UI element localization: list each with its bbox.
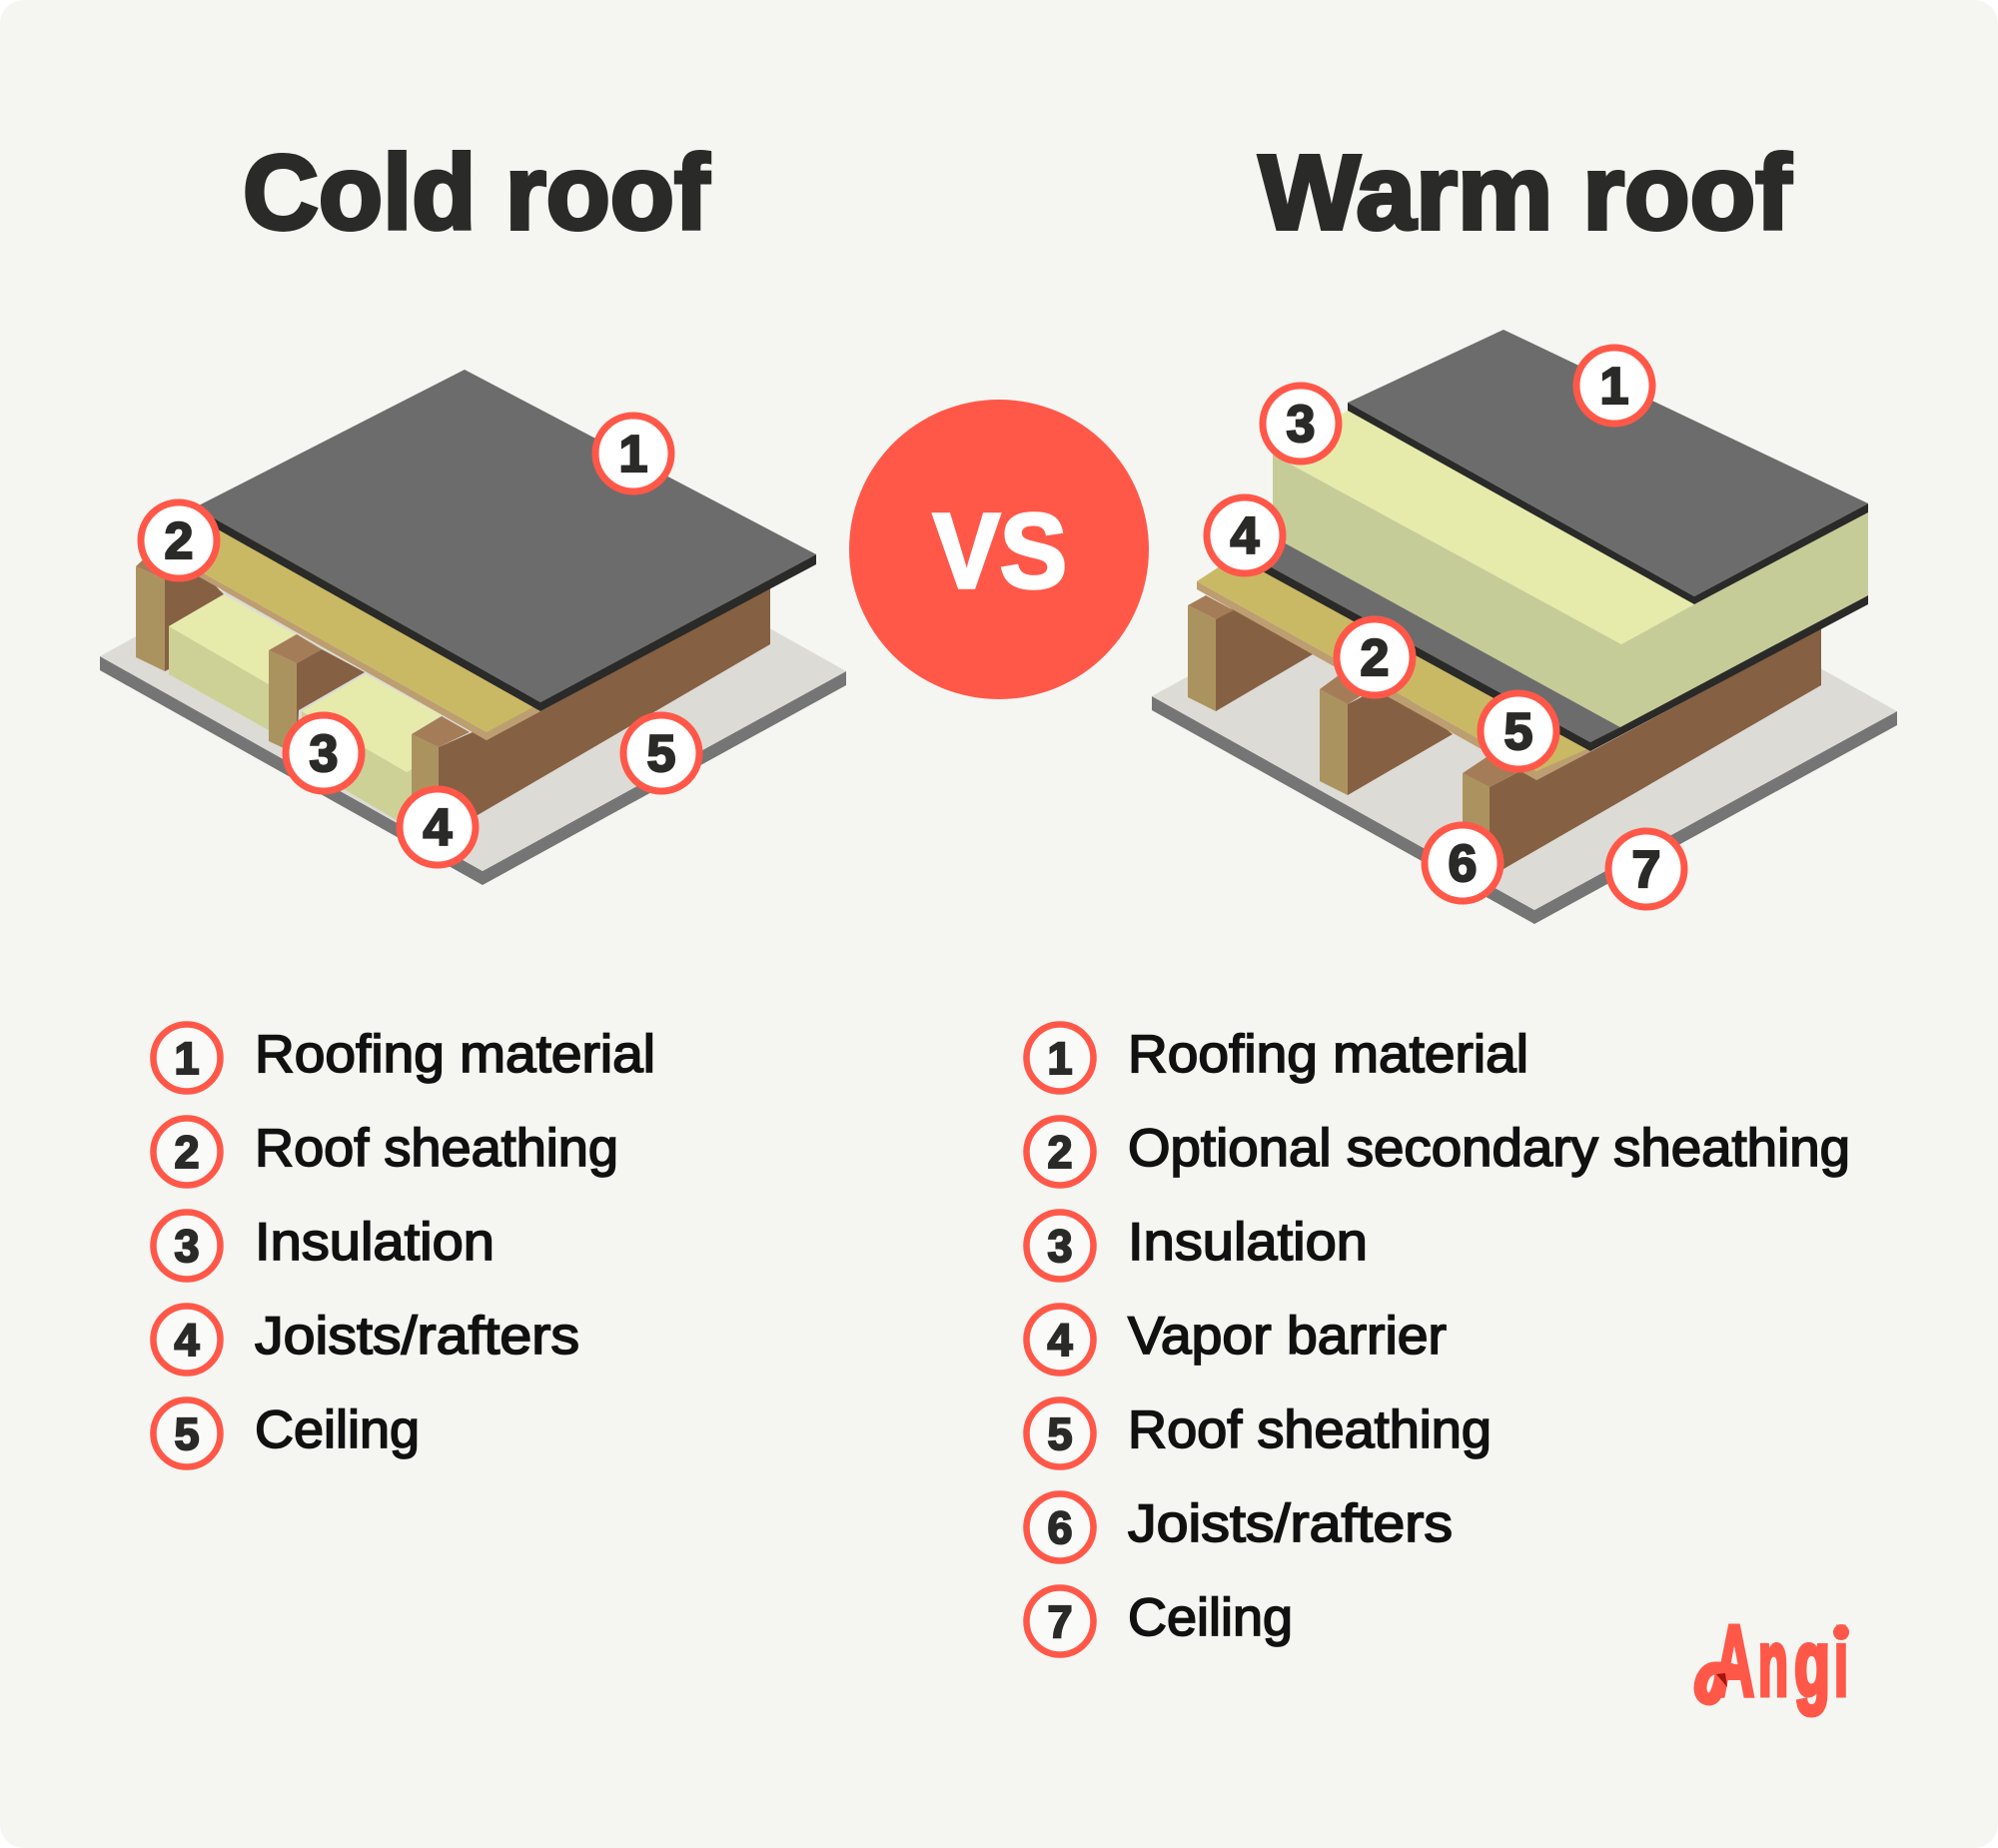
item 3: 3: [1047, 1221, 1073, 1272]
item 2: Roof sheathing: [255, 1119, 618, 1178]
item 3: [1027, 1213, 1368, 1279]
rigid insulation: [1273, 411, 1868, 727]
joist three with long side: [412, 587, 770, 837]
insulation batt two: [302, 674, 442, 829]
item 2: 2: [174, 1127, 200, 1178]
legend: cold roof: [154, 1025, 655, 1466]
item 5: 5: [174, 1408, 200, 1459]
logo: Angi: g: [1794, 1610, 1830, 1715]
marker 4: warm: 4: [1231, 507, 1260, 565]
vapor barrier: [1239, 530, 1868, 751]
marker 2: cold: 2: [165, 512, 193, 570]
item 7: Ceiling: [1128, 1588, 1293, 1647]
secondary sheathing: [1197, 547, 1591, 780]
item 1: [1027, 1025, 1528, 1091]
marker 5: warm: 5: [1504, 703, 1532, 761]
item 1: 1: [1047, 1033, 1073, 1084]
roofing material: [1348, 330, 1868, 604]
item 3: [154, 1213, 495, 1279]
item 2: [154, 1119, 618, 1185]
joist one: [136, 539, 224, 671]
item 7: 7: [1047, 1596, 1073, 1647]
item 1: 1: [174, 1033, 200, 1084]
insulation batt one: [169, 594, 296, 730]
marker 1: warm: [1576, 348, 1652, 424]
roofing material: [195, 370, 816, 711]
ceiling slab: [1152, 497, 1897, 924]
item 7: [1027, 1588, 1293, 1654]
logo: Angi: n: [1758, 1610, 1788, 1715]
marker 3: warm: 3: [1287, 396, 1315, 454]
item 4: Vapor barrier: [1128, 1307, 1447, 1366]
item 5: Roof sheathing: [1128, 1400, 1492, 1459]
marker 4: cold: 4: [424, 799, 453, 857]
joist two: [1320, 664, 1453, 795]
marker 6: warm: [1425, 825, 1500, 901]
item 2: 2: [1047, 1127, 1073, 1178]
VS badge: [849, 400, 1149, 699]
item 3: Insulation: [1128, 1213, 1368, 1272]
item 4: [154, 1307, 579, 1373]
roof sheathing: [165, 514, 540, 740]
item 5: Ceiling: [255, 1400, 420, 1459]
logo: Angi: [1700, 1605, 1849, 1717]
marker 4: warm: [1207, 497, 1283, 573]
title: Cold roof: Cold roof: [243, 134, 710, 252]
marker 5: cold: 5: [647, 725, 675, 783]
VS badge: VS: [933, 492, 1067, 610]
item 4: [1027, 1307, 1447, 1373]
logo: Angi: i: [1834, 1610, 1848, 1715]
diagram: cold roof cross-section: [100, 370, 846, 885]
marker 1: cold: [595, 416, 671, 491]
diagram: warm roof cross-section: [1152, 330, 1897, 924]
marker 6: warm: 6: [1449, 835, 1477, 893]
item 4: 4: [174, 1315, 200, 1366]
item 2: Optional secondary sheathing: [1128, 1119, 1850, 1178]
marker 7: warm: 7: [1632, 841, 1660, 899]
marker 3: warm: [1263, 386, 1339, 462]
logo: Angi: A: [1714, 1605, 1754, 1717]
item 6: Joists/rafters: [1128, 1494, 1453, 1553]
item 4: Joists/rafters: [255, 1307, 579, 1366]
item 5: 5: [1047, 1408, 1073, 1459]
item 3: 3: [174, 1221, 200, 1272]
item 3: Insulation: [255, 1213, 495, 1272]
marker 2: warm: 2: [1361, 629, 1389, 687]
item 5: [154, 1400, 420, 1466]
item 6: [1027, 1494, 1453, 1560]
joist three with long side: [1463, 628, 1821, 879]
legend: warm roof: [1027, 1025, 1850, 1654]
item 1: [154, 1025, 655, 1091]
marker 4: cold: [400, 789, 476, 865]
marker 5: cold: [623, 715, 699, 791]
marker 2: cold: [141, 502, 217, 578]
joist one: [1188, 595, 1313, 711]
marker 3: cold: 3: [310, 725, 338, 783]
item 1: Roofing material: [255, 1025, 655, 1084]
marker 1: cold: 1: [619, 426, 647, 483]
ceiling slab: [100, 457, 846, 885]
item 6: 6: [1047, 1502, 1073, 1553]
marker 3: cold: [286, 715, 362, 791]
item 1: Roofing material: [1128, 1025, 1528, 1084]
title: Warm roof: Warm roof: [1259, 134, 1792, 252]
marker 2: warm: [1337, 619, 1413, 695]
marker 1: warm: 1: [1600, 358, 1628, 416]
item 5: [1027, 1400, 1492, 1466]
marker 7: warm: [1608, 831, 1684, 907]
item 4: 4: [1047, 1315, 1073, 1366]
joist two: [269, 634, 365, 754]
marker 5: warm: [1481, 693, 1556, 769]
